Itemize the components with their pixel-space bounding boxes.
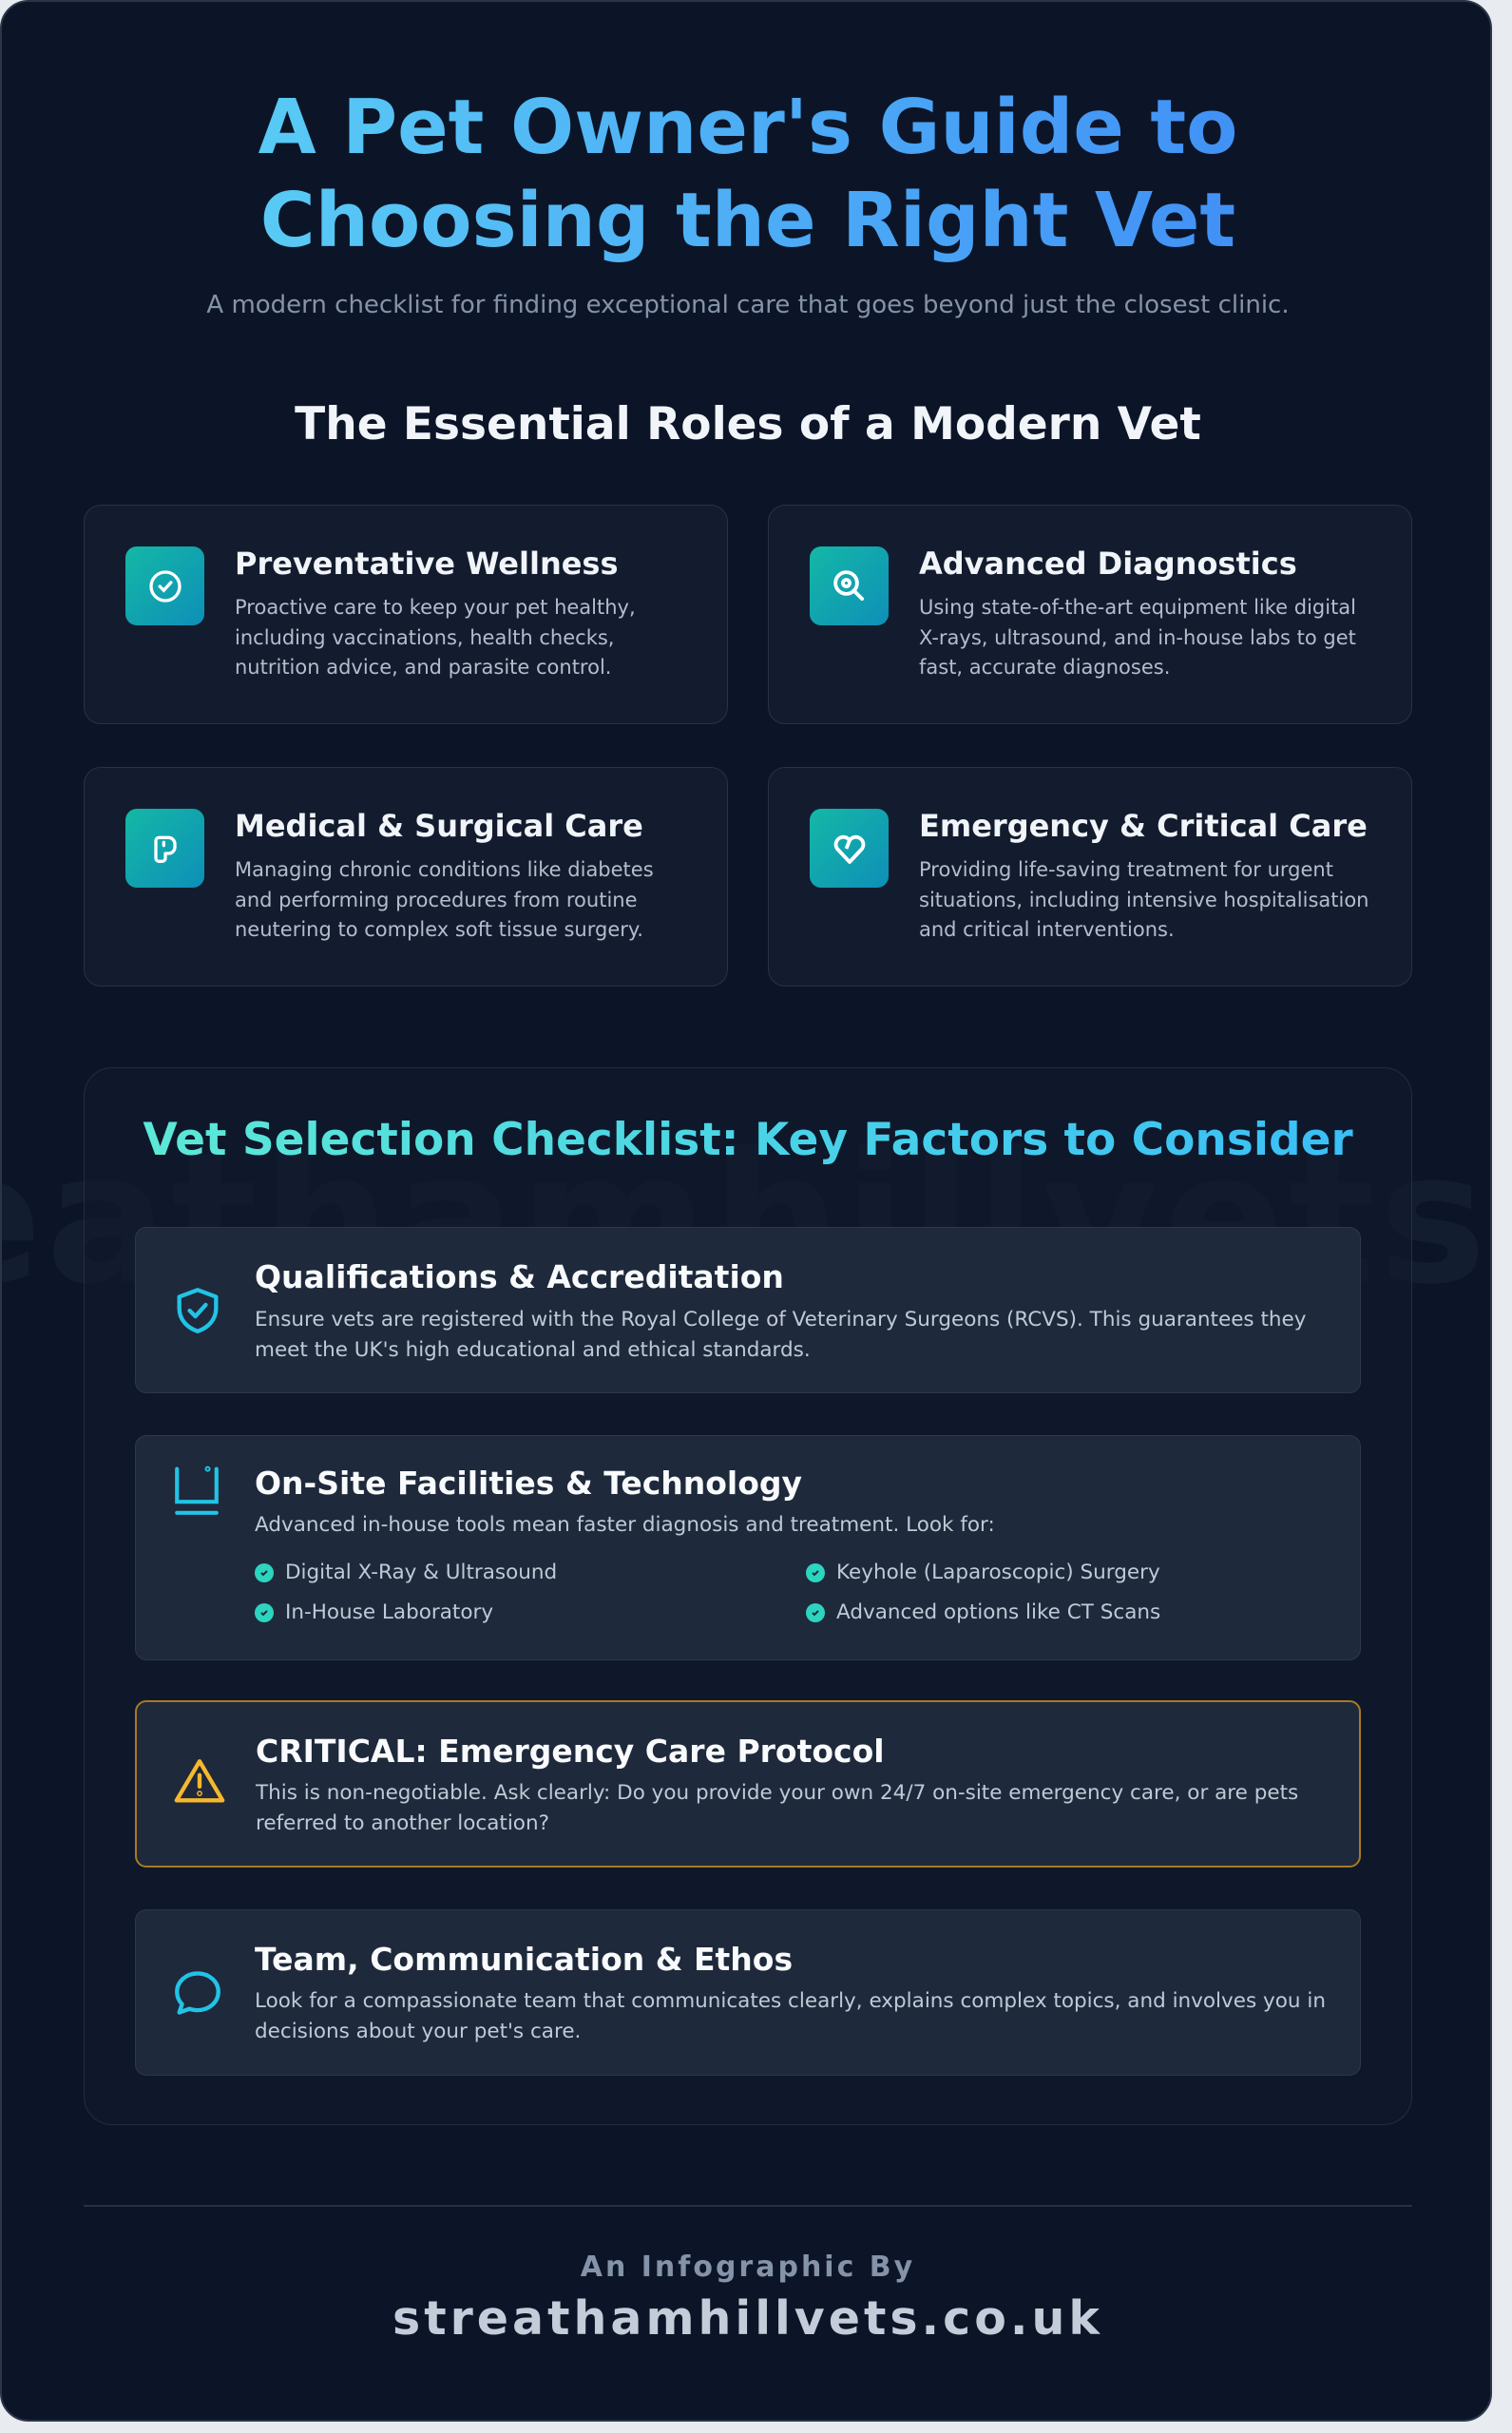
card: emergency [768,767,1412,987]
item text: Advanced in-house tools mean faster diagnosis and treatment. Look for: [255,1513,995,1537]
title [2,81,1494,267]
card: preventative wellness [84,505,728,724]
footer: attribution: An Infographic By [581,2251,915,2284]
icon: tray [175,1466,219,1515]
item title: Qualifications & Accreditation [255,1258,784,1295]
icon: shield [177,1288,219,1333]
footer: attribution [392,2251,1103,2346]
feature list: In-House Laboratory [285,1600,493,1624]
item: emergency protocol [135,1700,1361,1868]
item title: CRITICAL: Emergency Care Protocol [256,1733,885,1770]
checklist panel [84,1067,1412,2125]
item: qualifications [135,1227,1361,1393]
feature list: Advanced options like CT Scans [836,1600,1160,1624]
item text: Ensure vets are registered with the Royal College of Veterinary Surgeons (RCVS). This guarantees they meet the UK's high educational and ethical standards. [255,1308,1306,1362]
title: Choosing the Right Vet [260,177,1235,264]
icon: heart [810,809,889,888]
card title: Emergency & Critical Care [919,808,1368,844]
icon: check circle [125,546,204,625]
item: team [135,1909,1361,2076]
item text: Look for a compassionate team that communicates clearly, explains complex topics, and involves you in decisions about your pet's care. [255,1989,1326,2043]
card text: Providing life-saving treatment for urgent situations, including intensive hospitalisation and critical interventions. [919,858,1368,941]
feature list [255,1561,1160,1624]
footer: attribution: streathamhillvets.co.uk [392,2291,1103,2346]
checklist heading: Vet Selection Checklist: Key Factors to Consider [143,1114,1353,1166]
icon: warning [175,1759,224,1802]
icon: magnifier [810,546,889,625]
card text: Proactive care to keep your pet healthy, including vaccinations, health checks, nutrition advice, and parasite control. [235,596,636,679]
subtitle: A modern checklist for finding exceptional care that goes beyond just the closest clinic. [206,291,1290,319]
card: advanced diagnostics [768,505,1412,724]
title: A Pet Owner's Guide to [258,84,1237,171]
card title: Medical & Surgical Care [235,808,643,844]
card title: Preventative Wellness [235,546,619,582]
card: medical & surgical [84,767,728,987]
item title: On-Site Facilities & Technology [255,1465,802,1502]
feature list: Keyhole (Laparoscopic) Surgery [836,1561,1160,1584]
card text: Using state-of-the-art equipment like digital X-rays, ultrasound, and in-house labs to get fast, accurate diagnoses. [919,596,1356,679]
item text: This is non-negotiable. Ask clearly: Do you provide your own 24/7 on-site emergency care, or are pets referred to another location? [256,1781,1298,1835]
card title: Advanced Diagnostics [919,546,1297,582]
item title: Team, Communication & Ethos [255,1941,793,1978]
icon: medical [125,809,204,888]
item: facilities [135,1435,1361,1660]
icon: chat bubble [175,1971,220,2015]
feature list: Digital X-Ray & Ultrasound [285,1561,557,1584]
section heading: roles: The Essential Roles of a Modern Vet [295,398,1201,450]
card text: Managing chronic conditions like diabetes and performing procedures from routine neutering to complex soft tissue surgery. [235,858,654,941]
